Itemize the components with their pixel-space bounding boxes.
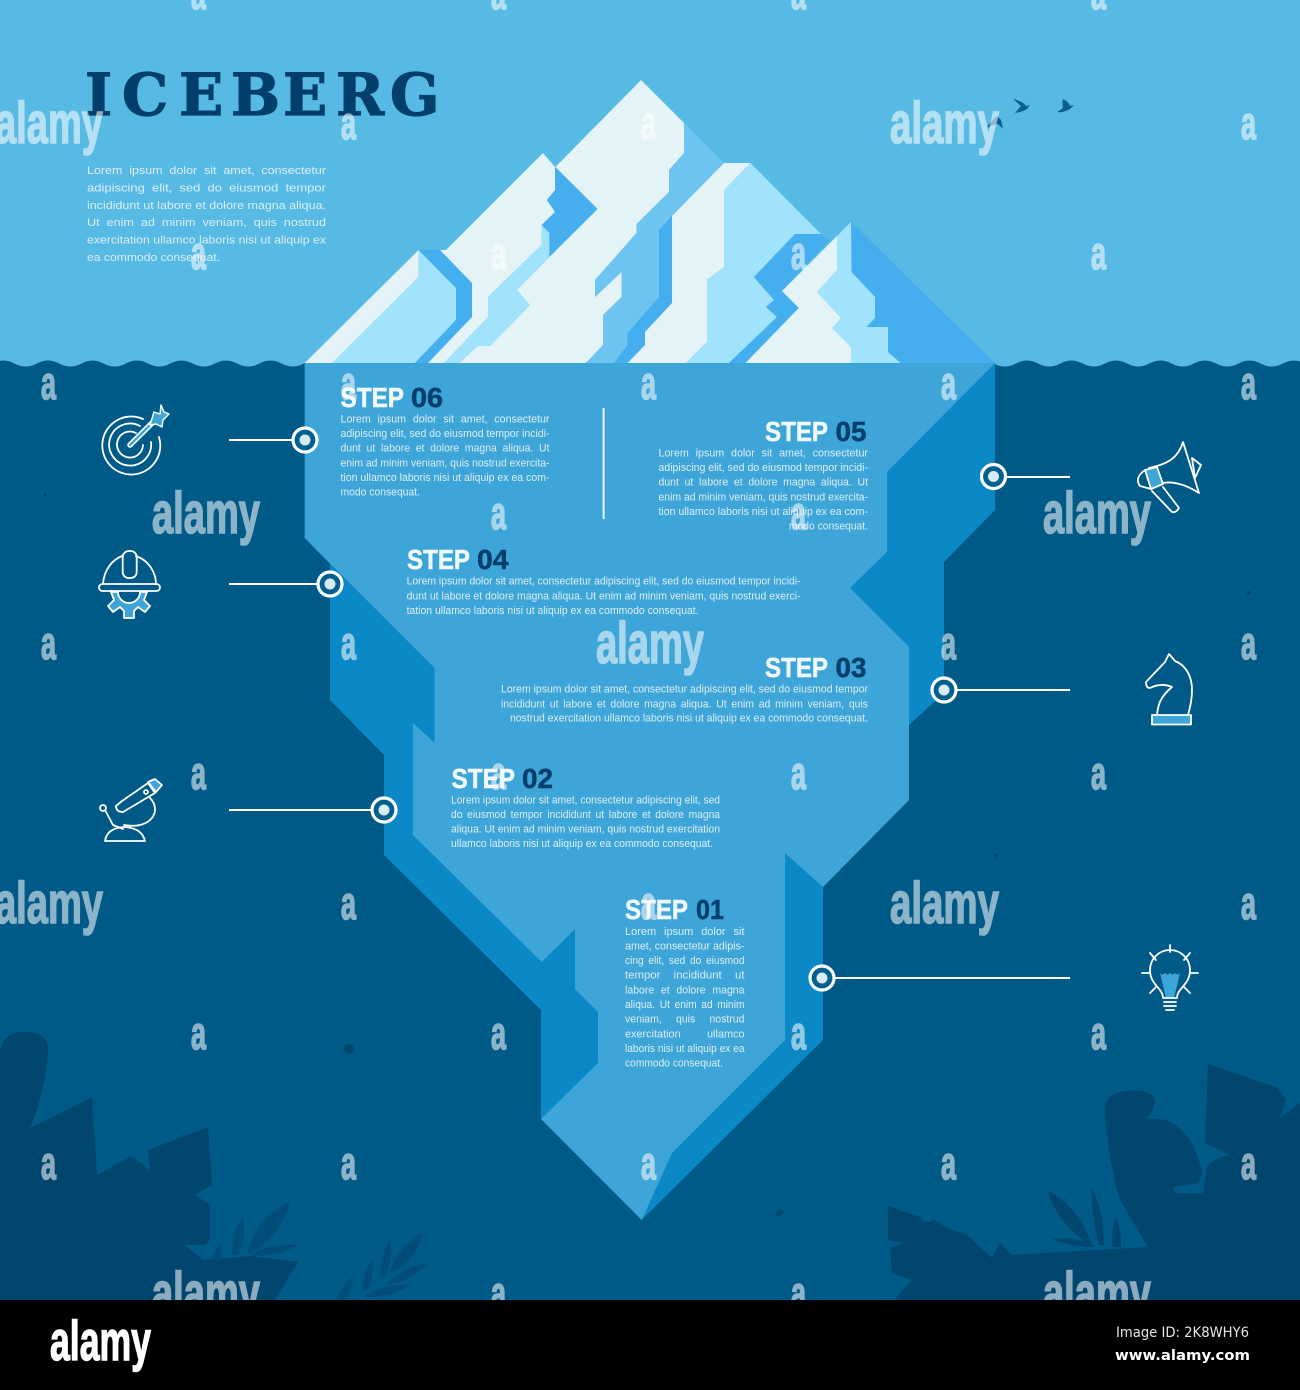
footer logo: alamy xyxy=(50,1309,151,1372)
watermark: a xyxy=(1241,617,1256,669)
marker rings xyxy=(293,428,1006,990)
step 01: laboris nisi ut aliquip ex ea xyxy=(625,1043,745,1055)
intro paragraph: adipiscing elit, sed do eiusmod tempor xyxy=(87,182,326,194)
icon: chess knight xyxy=(1146,654,1192,724)
step 06: modo consequat. xyxy=(340,486,420,498)
deep sea with wavy waterline xyxy=(0,360,1300,1300)
icon: hard hat with gear xyxy=(99,551,160,618)
step 05: 05 xyxy=(836,416,866,447)
step 01: STEP xyxy=(625,894,688,925)
marker ring centres xyxy=(300,434,999,984)
watermark: alamy xyxy=(1043,1261,1151,1326)
seabed foliage: right xyxy=(888,1064,1300,1300)
watermark: a xyxy=(1241,357,1256,409)
step 01 xyxy=(625,894,745,1070)
watermark: a xyxy=(641,97,656,149)
step 01: labore et dolore magna xyxy=(625,984,745,996)
watermark: a xyxy=(341,617,356,669)
step 06: dunt ut labore et dolore magna aliqua. Ut xyxy=(340,442,550,454)
watermark: a xyxy=(1241,1137,1256,1189)
step 03 xyxy=(501,652,868,724)
watermark: a xyxy=(41,1137,56,1189)
birds xyxy=(987,99,1074,129)
footer image id: Image ID: 2K8WHY6 xyxy=(1116,1325,1249,1341)
watermark: a xyxy=(941,1137,956,1189)
watermark: a xyxy=(941,357,956,409)
step 05: modo consequat. xyxy=(789,520,868,532)
step 04: dunt ut labore et dolore magna aliqua. Ut enim ad minim veniam, quis nostrud exerci- xyxy=(407,590,801,602)
black footer bar xyxy=(0,1300,1300,1390)
watermark: a xyxy=(191,227,206,279)
watermark: a xyxy=(191,1007,206,1059)
watermark: a xyxy=(341,97,356,149)
watermark: alamy xyxy=(152,1261,260,1326)
step 05: enim ad minim veniam, quis nostrud exercita- xyxy=(658,492,868,504)
step 06: Lorem ipsum dolor sit amet, consectetur xyxy=(340,414,550,426)
step 03: 03 xyxy=(836,652,866,683)
watermark: alamy xyxy=(152,481,260,546)
sky background xyxy=(0,0,1300,380)
step 03: nostrud exercitation ullamco laboris nisi ut aliquip ex ea commodo consequat. xyxy=(510,712,868,724)
icon: megaphone xyxy=(1138,442,1201,512)
watermark: a xyxy=(341,357,356,409)
footer website: www.alamy.com xyxy=(1115,1348,1250,1364)
watermark: a xyxy=(491,227,506,279)
step 01: amet, consectetur adipis- xyxy=(625,940,745,952)
step 01: 01 xyxy=(696,894,724,925)
intro paragraph: Ut enim ad minim veniam, quis nostrud xyxy=(87,217,326,229)
step 04: STEP xyxy=(407,544,470,575)
step 01: veniam, quis nostrud xyxy=(625,1014,744,1026)
step 02: Lorem ipsum dolor sit amet, consectetur adipiscing elit, sed xyxy=(451,794,720,806)
watermark: a xyxy=(1091,747,1106,799)
icon: target with arrow xyxy=(102,405,169,475)
watermark: a xyxy=(1091,227,1106,279)
step 02: do eiusmod tempor incididunt ut labore et dolore magna xyxy=(451,809,721,821)
step 04: Lorem ipsum dolor sit amet, consectetur adipiscing elit, sed do eiusmod tempor incidi- xyxy=(407,576,801,588)
sea specks xyxy=(44,494,1251,1216)
watermark: a xyxy=(1091,1007,1106,1059)
iceberg: above-water peaks xyxy=(305,80,995,363)
step 03: incididunt ut labore et dolore magna aliqua. Ut enim ad minim veniam, quis xyxy=(501,698,868,710)
watermark: a xyxy=(191,747,206,799)
step 05: tion ullamco laboris nisi ut aliquip ex ea com- xyxy=(658,506,868,518)
step 02: STEP xyxy=(452,763,515,794)
watermark: a xyxy=(791,747,806,799)
watermark: a xyxy=(791,487,806,539)
step 05 xyxy=(658,416,869,532)
watermark: alamy xyxy=(890,871,999,936)
intro paragraph: exercitation ullamco laboris nisi ut aliquip ex xyxy=(87,234,326,246)
watermark: a xyxy=(1241,97,1256,149)
underwater lit side xyxy=(305,363,995,1220)
watermark: a xyxy=(491,1007,506,1059)
watermark: a xyxy=(491,1267,506,1319)
watermark: a xyxy=(41,617,56,669)
step 06 xyxy=(340,382,550,498)
iceberg: underwater part xyxy=(305,363,995,1220)
step 02: aliqua. Ut enim ad minim veniam, quis nostrud exercitation xyxy=(451,824,720,836)
watermark: a xyxy=(791,1007,806,1059)
intro paragraph xyxy=(87,165,326,264)
step 01: commodo consequat. xyxy=(625,1058,723,1070)
underwater shadow side xyxy=(305,363,995,1220)
step 02: 02 xyxy=(522,763,553,794)
watermark: alamy xyxy=(1043,481,1151,546)
step 06: tion ullamco laboris nisi ut aliquip ex ea com- xyxy=(340,472,550,484)
intro paragraph: incididunt ut labore et dolore magna aliqua. xyxy=(87,200,326,212)
watermark: alamy xyxy=(596,611,704,676)
watermark: a xyxy=(1241,877,1256,929)
watermark: a xyxy=(791,1267,806,1319)
step 05: adipiscing elit, sed do eiusmod tempor incidi- xyxy=(658,462,868,474)
step 02 xyxy=(451,763,721,850)
step 04: tation ullamco laboris nisi ut aliquip ex ea commodo consequat. xyxy=(407,605,699,617)
watermark: a xyxy=(491,747,506,799)
step 06: enim ad minim veniam, quis nostrud exercita- xyxy=(340,458,550,470)
watermark: alamy xyxy=(890,91,999,156)
step 04 xyxy=(407,544,801,617)
step 01: Lorem ipsum dolor sit xyxy=(625,926,745,938)
step 03: Lorem ipsum dolor sit amet, consectetur adipiscing elit, sed do eiusmod tempor xyxy=(501,684,868,696)
step 06: 06 xyxy=(411,382,443,413)
step 06: STEP xyxy=(340,382,404,413)
step 05: dunt ut labore et dolore magna aliqua. Ut xyxy=(658,476,869,488)
step 01: tempor incididunt ut xyxy=(625,970,745,982)
watermark: a xyxy=(491,487,506,539)
step 05: Lorem ipsum dolor sit amet, consectetur xyxy=(658,448,868,460)
step 06: adipiscing elit, sed do eiusmod tempor incidi- xyxy=(340,428,550,440)
watermark: a xyxy=(791,227,806,279)
watermark: a xyxy=(941,617,956,669)
intro paragraph: ea commodo consequat. xyxy=(87,252,220,264)
seabed foliage: left xyxy=(0,1032,428,1300)
watermark: a xyxy=(41,357,56,409)
watermark: a xyxy=(641,877,656,929)
step 04: 04 xyxy=(477,544,509,575)
step 01: aliqua. Ut enim ad minim xyxy=(625,999,744,1011)
step 01: cing elit, sed do eiusmod xyxy=(625,955,744,967)
title: ICEBERG xyxy=(85,61,440,129)
watermark: a xyxy=(641,1137,656,1189)
icon: light bulb xyxy=(1142,945,1198,1010)
step 03: STEP xyxy=(765,652,828,683)
watermark: a xyxy=(641,357,656,409)
step 01: exercitation ullamco xyxy=(625,1028,744,1040)
step 02: ullamco laboris nisi ut aliquip ex ea commodo consequat. xyxy=(451,838,713,850)
watermark: a xyxy=(341,877,356,929)
intro paragraph: Lorem ipsum dolor sit amet, consectetur xyxy=(87,165,326,177)
watermark: a xyxy=(341,1137,356,1189)
connector lines xyxy=(229,440,1070,978)
step 05: STEP xyxy=(765,416,828,447)
divider between step 06 and step 05 xyxy=(603,408,605,519)
icon: microscope xyxy=(100,779,162,841)
